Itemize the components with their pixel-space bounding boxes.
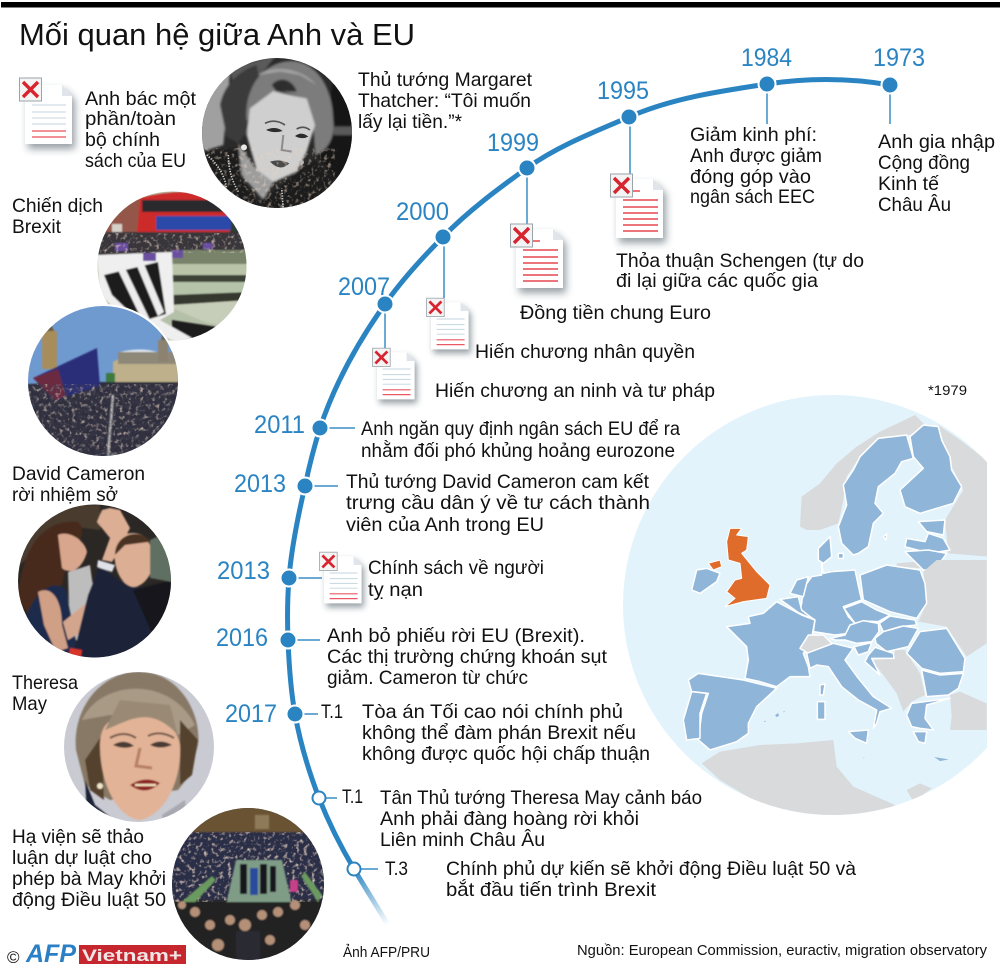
- icon: 2013 document: [320, 552, 364, 607]
- label: House of Commons: luận dự luật cho: [12, 847, 152, 869]
- item: T.3 article 50: T.3: [385, 858, 408, 880]
- item: 2011 text: nhằm đối phó khủng hoảng eurozone: [361, 439, 675, 462]
- thatcher text: lấy lại tiền.”*: [358, 111, 462, 133]
- icon: legend document: [20, 78, 75, 149]
- label: Theresa May: [12, 672, 78, 715]
- thatcher text: [358, 69, 533, 133]
- icon: 1995 document: [610, 174, 666, 243]
- top black bar: [1, 2, 1000, 8]
- photo: Brexit campaign: [95, 190, 250, 343]
- footer: logos: [7, 940, 186, 968]
- photo: David Cameron: [18, 504, 171, 658]
- year labels: 1984: [741, 44, 792, 72]
- item: 1984 text: [690, 124, 822, 208]
- item: T.3 article 50: bắt đầu tiến trình Brexit: [446, 878, 657, 901]
- item: 2016 text: [327, 625, 608, 689]
- year labels: 1999: [487, 129, 539, 157]
- footer: logos: ©: [7, 948, 20, 967]
- item: 2011 text: Anh ngăn quy định ngân sách EU để ra: [361, 418, 680, 440]
- item: T.1 May warning: T.1: [342, 786, 363, 808]
- year labels: 2017: [225, 700, 277, 728]
- year labels: 2011: [254, 411, 305, 439]
- label: Brexit campaign: [12, 195, 103, 238]
- item: T.1 May warning: [342, 786, 702, 851]
- photo: Theresa May: [64, 672, 214, 822]
- item: 2017 T.1 court: không thể đàm phán Brexit nếu: [362, 722, 636, 744]
- legend text: Anh bác một: [85, 88, 197, 110]
- item: 2013 asylum text: [368, 557, 544, 601]
- year labels: 2000: [396, 198, 449, 226]
- item: T.3 article 50: Chính phủ dự kiến sẽ khởi động Điều luật 50 và: [446, 858, 856, 880]
- source: Nguồn: European Commission, euractiv, migration observatory: [577, 943, 988, 959]
- footer: logos: Vietnam+: [82, 946, 182, 965]
- item: 2013 text: trưng cầu dân ý về tư cách thành: [346, 492, 650, 514]
- label: David Cameron: rời nhiệm sở: [12, 484, 118, 506]
- item: 1973 text: [878, 131, 995, 216]
- photo: crowd with EU flag: [25, 300, 181, 460]
- icon: 2000 document: [427, 298, 471, 353]
- map: Europe with UK highlighted: [623, 395, 1000, 823]
- label: Brexit campaign: Chiến dịch: [12, 195, 103, 217]
- item: T.1 May warning: Anh phải đàng hoàng rời khỏi: [380, 808, 639, 830]
- timeline curve: [288, 80, 890, 925]
- item: 2013 text: [346, 471, 650, 536]
- item: 1995 text: [616, 250, 864, 292]
- item: 1984 text: Anh được giảm: [690, 145, 822, 167]
- item: 2016 text: giảm. Cameron từ chức: [327, 667, 528, 689]
- footer: logos: AFP: [25, 940, 76, 968]
- item: 2007 text: Hiến chương an ninh và tư pháp: [435, 380, 715, 402]
- item: 1995 text: Thỏa thuận Schengen (tự do: [616, 250, 864, 272]
- item: 1973 text: Cộng đồng: [878, 152, 970, 174]
- item: 1973 text: Anh gia nhập: [878, 131, 995, 153]
- year labels: [216, 44, 925, 728]
- icon: 1999 document: [510, 224, 566, 293]
- label: Brexit campaign: Brexit: [12, 216, 62, 238]
- label: House of Commons: Hạ viện sẽ thảo: [12, 826, 144, 848]
- item: 1999 text: Đồng tiền chung Euro: [520, 302, 711, 324]
- item: 2017 T.1 court: [321, 701, 650, 765]
- item: 1973 text: Kinh tế: [878, 173, 939, 195]
- label: Theresa May: Theresa: [12, 672, 78, 694]
- year labels: 2007: [338, 273, 390, 301]
- legend text: sách của EU: [85, 150, 186, 172]
- thatcher text: Thatcher: “Tôi muốn: [358, 90, 531, 112]
- label: Theresa May: May: [12, 693, 47, 715]
- item: 1984 text: ngân sách EEC: [690, 186, 815, 208]
- item: 1995 text: đi lại giữa các quốc gia: [616, 270, 818, 292]
- legend text: phần/toàn: [85, 108, 176, 130]
- item: 2017 T.1 court: T.1: [321, 701, 343, 723]
- year labels: 2013: [234, 470, 286, 498]
- label: House of Commons: động Điều luật 50: [12, 889, 166, 911]
- item: 2017 T.1 court: Tòa án Tối cao nói chính phủ: [362, 701, 623, 723]
- timeline dots: [280, 76, 898, 876]
- item: 2000 text: Hiến chương nhân quyền: [475, 341, 695, 363]
- item: 1984 text: đóng góp vào: [690, 166, 811, 188]
- label: House of Commons: phép bà May khởi: [12, 868, 166, 890]
- thatcher text: Thủ tướng Margaret: [358, 69, 533, 91]
- item: 2016 text: Anh bỏ phiếu rời EU (Brexit).: [327, 625, 585, 647]
- item: 1973 text: Châu Âu: [878, 193, 951, 216]
- item: 2013 text: viên của Anh trong EU: [346, 514, 544, 536]
- label: David Cameron: [12, 463, 145, 506]
- map sea circle: [623, 395, 1000, 815]
- item: 2016 text: Các thị trường chứng khoán sụt: [327, 646, 608, 668]
- item: T.3 article 50: [385, 858, 856, 901]
- label: House of Commons: [12, 826, 166, 911]
- icon: 2007 document: [373, 348, 417, 403]
- title: Mối quan hệ giữa Anh và EU: [19, 17, 415, 52]
- item: 1984 text: Giảm kinh phí:: [690, 124, 817, 146]
- photo credit: Ảnh AFP/PRU: [343, 944, 430, 961]
- timeline connectors: [288, 84, 890, 869]
- legend text: [85, 88, 197, 172]
- year labels: 2016: [216, 624, 268, 652]
- photo: House of Commons: [170, 806, 326, 962]
- year labels: 1973: [873, 44, 925, 72]
- item: 2017 T.1 court: không được quốc hội chấp thuận: [362, 743, 650, 765]
- item: 2013 text: Thủ tướng David Cameron cam kết: [346, 471, 650, 493]
- item: T.1 May warning: Liên minh Châu Âu: [380, 828, 545, 851]
- item: 2013 asylum text: Chính sách về người: [368, 557, 544, 579]
- item: T.1 May warning: Tân Thủ tướng Theresa May cảnh báo: [380, 787, 702, 809]
- year labels: 1995: [597, 77, 649, 105]
- year labels: 2013: [217, 557, 270, 585]
- legend text: bộ chính: [85, 129, 160, 151]
- label: David Cameron: David Cameron: [12, 463, 145, 485]
- footnote: *1979: [928, 382, 967, 398]
- photo: Margaret Thatcher: [200, 55, 355, 210]
- item: 2011 text: [361, 418, 680, 462]
- item: 2013 asylum text: tỵ nạn: [368, 579, 423, 601]
